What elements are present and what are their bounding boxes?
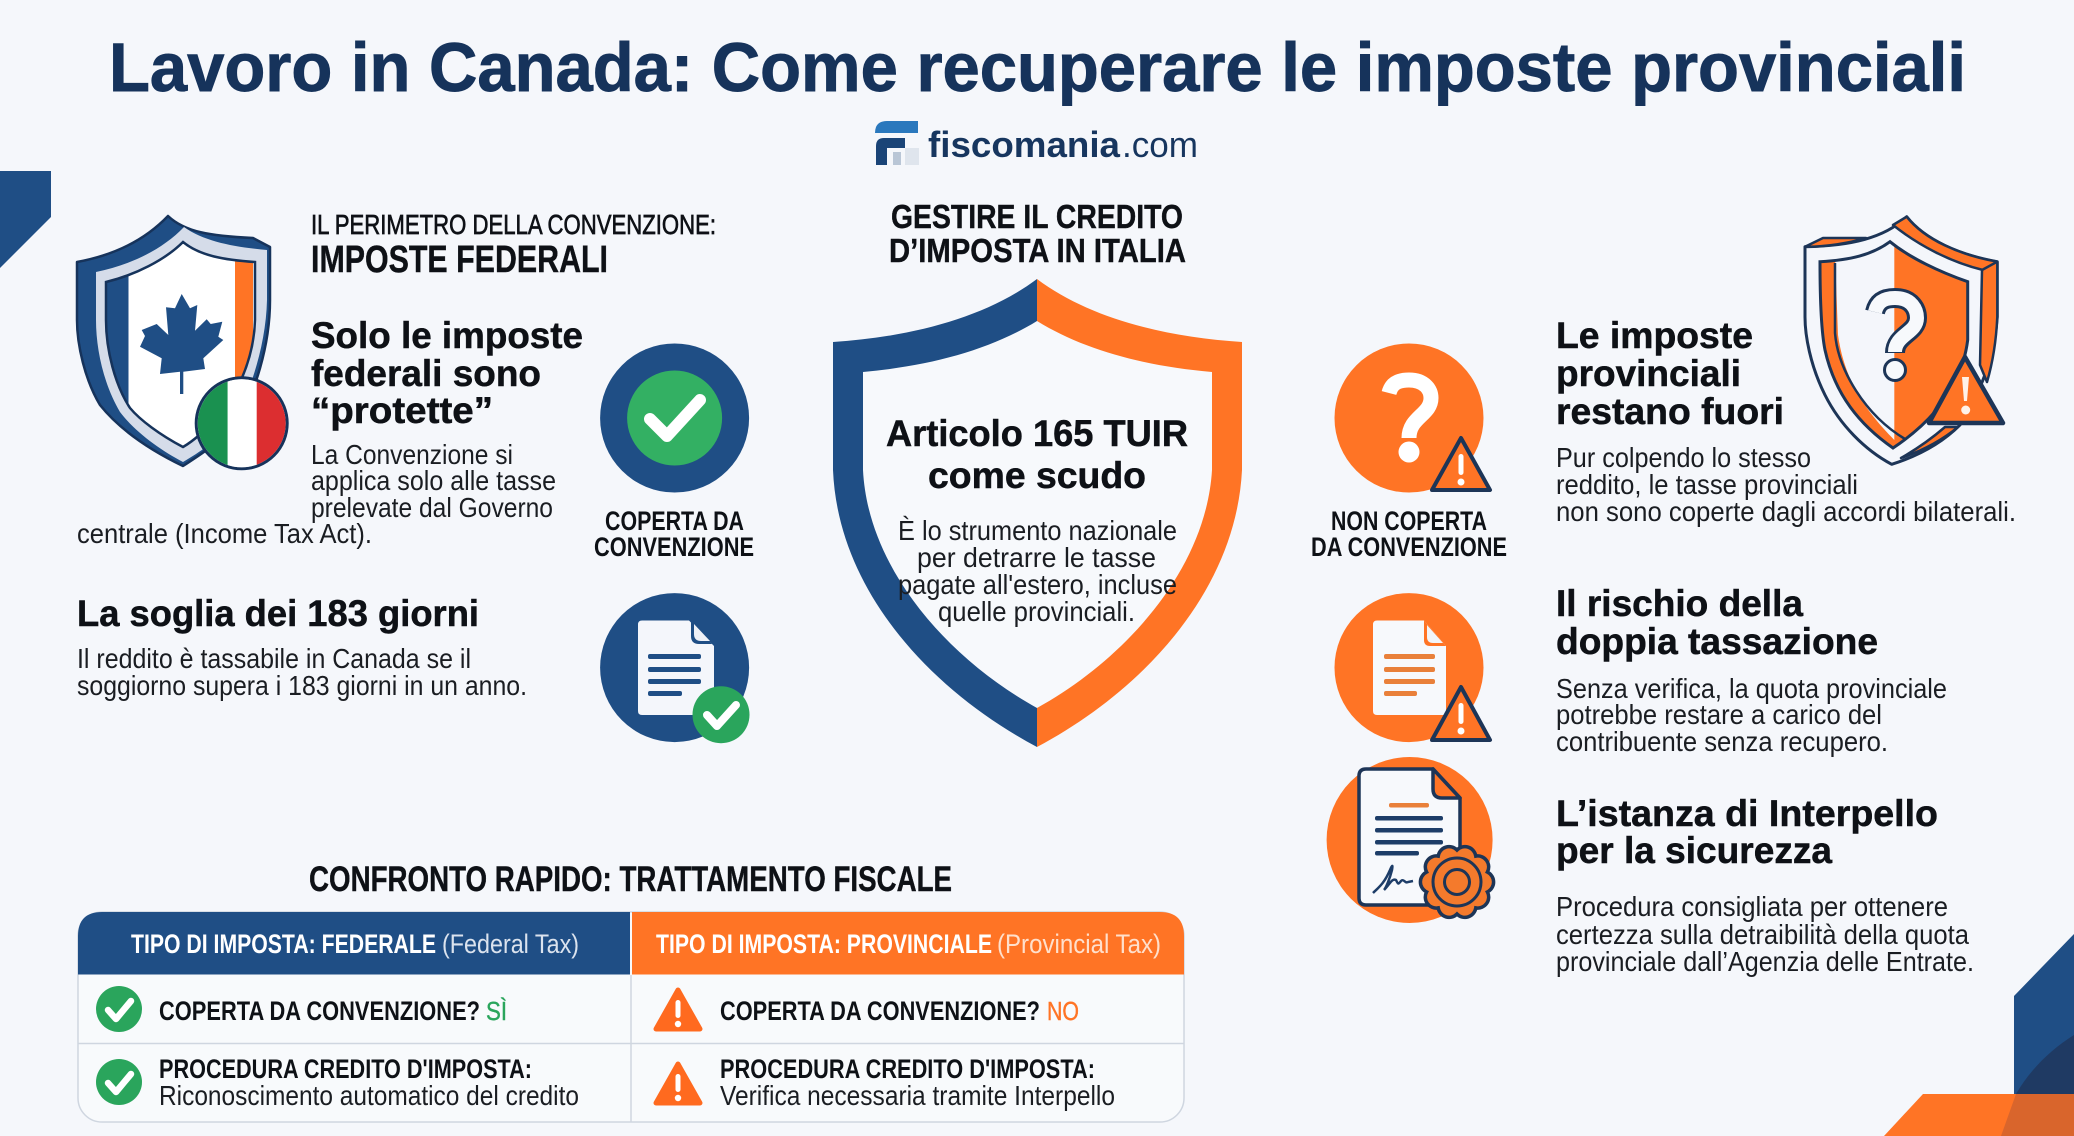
text block: imposte provinciali: Pur colpendo lo stesso xyxy=(1556,442,1811,473)
label: non coperta da convenzione xyxy=(1311,506,1507,562)
header: provinciale: (Provincial Tax) xyxy=(997,929,1161,959)
icon: orange document with warning xyxy=(1334,593,1490,742)
text block: solo le imposte federali: La Convenzione si xyxy=(311,439,513,470)
shield text: pagate all'estero, incluse xyxy=(898,569,1177,600)
center heading: GESTIRE IL CREDITO xyxy=(891,198,1183,235)
icon: orange shield with question and warning xyxy=(1805,217,2003,464)
label: non coperta da convenzione: NON COPERTA xyxy=(1331,506,1487,536)
text block: solo le imposte federali xyxy=(77,315,583,549)
seal xyxy=(1420,847,1494,917)
text block: soglia dei 183 giorni xyxy=(77,593,527,701)
text block: soglia dei 183 giorni: soggiorno supera i 183 giorni in un anno. xyxy=(77,670,527,701)
icon: orange interpello document with seal xyxy=(1327,757,1494,923)
text block: imposte provinciali: provinciali xyxy=(1556,353,1741,394)
text block: solo le imposte federali: applica solo alle tasse xyxy=(311,465,556,496)
logo text: fiscomania xyxy=(928,124,1121,165)
logo icon xyxy=(875,121,919,165)
row: provinciale procedura: Verifica necessaria tramite Interpello xyxy=(720,1080,1115,1111)
shield text: quelle provinciali. xyxy=(938,596,1135,627)
text block: soglia dei 183 giorni: La soglia dei 183 giorni xyxy=(77,593,479,634)
header: federale: TIPO DI IMPOSTA: FEDERALE xyxy=(131,929,436,959)
text block: imposte provinciali xyxy=(1556,315,2016,527)
icon: orange question circle xyxy=(1334,344,1490,492)
text block: solo le imposte federali: federali sono xyxy=(311,353,541,394)
header: federale xyxy=(78,912,630,974)
header: provinciale: TIPO DI IMPOSTA: PROVINCIALE xyxy=(656,929,992,959)
shield text: come scudo xyxy=(928,455,1146,496)
left section heading: IL PERIMETRO DELLA CONVENZIONE: xyxy=(311,209,716,240)
icon: Canada shield with Italian flag xyxy=(77,216,289,470)
text block: solo le imposte federali: “protette” xyxy=(311,390,493,431)
text block: doppia tassazione xyxy=(1556,583,1947,757)
question mark xyxy=(1875,298,1917,380)
decoration: bottom-right corner xyxy=(1884,934,2074,1136)
text block: istanza di interpello xyxy=(1556,793,1974,977)
logo: fiscomania.com xyxy=(875,121,1198,165)
central shield xyxy=(833,279,1242,747)
warning triangle xyxy=(1929,357,2003,423)
label: coperta da convenzione: CONVENZIONE xyxy=(594,532,754,562)
logo text: .com xyxy=(1122,124,1198,165)
text block: soglia dei 183 giorni: Il reddito è tassabile in Canada se il xyxy=(77,643,471,674)
row: provinciale coperta: NO xyxy=(1047,996,1079,1026)
row: federale procedura: PROCEDURA CREDITO D'IMPOSTA: xyxy=(159,1054,532,1084)
shield text xyxy=(886,413,1188,627)
shield text: per detrarre le tasse xyxy=(917,542,1156,573)
text block: istanza di interpello: certezza sulla detraibilità della quota xyxy=(1556,919,1969,950)
label: coperta da convenzione: COPERTA DA xyxy=(605,506,744,536)
left section heading xyxy=(311,209,716,281)
header: provinciale xyxy=(632,912,1184,974)
text block: solo le imposte federali: centrale (Income Tax Act). xyxy=(77,518,372,549)
header: federale: (Federal Tax) xyxy=(442,929,579,959)
text block: istanza di interpello: Procedura consigliata per ottenere xyxy=(1556,891,1948,922)
text block: imposte provinciali: reddito, le tasse provinciali xyxy=(1556,469,1858,500)
row: provinciale coperta: COPERTA DA CONVENZIONE? xyxy=(720,996,1040,1026)
maple leaf xyxy=(140,294,223,394)
center heading: D’IMPOSTA IN ITALIA xyxy=(889,232,1186,269)
table heading: CONFRONTO RAPIDO: TRATTAMENTO FISCALE xyxy=(309,860,952,899)
text block: istanza di interpello: L’istanza di Interpello xyxy=(1556,793,1938,834)
label: coperta da convenzione xyxy=(594,506,754,562)
row: federale coperta: COPERTA DA CONVENZIONE? xyxy=(159,996,480,1026)
text block: istanza di interpello: provinciale dall’Agenzia delle Entrate. xyxy=(1556,946,1974,977)
text block: doppia tassazione: potrebbe restare a carico del xyxy=(1556,699,1882,730)
row: provinciale procedura xyxy=(656,1054,1115,1111)
row: federale procedura xyxy=(96,1054,579,1111)
text block: imposte provinciali: non sono coperte dagli accordi bilaterali. xyxy=(1556,496,2016,527)
decoration: top-left corner xyxy=(0,171,51,268)
text block: istanza di interpello: per la sicurezza xyxy=(1556,830,1832,871)
row: provinciale procedura: PROCEDURA CREDITO D'IMPOSTA: xyxy=(720,1054,1095,1084)
row: federale procedura: Riconoscimento automatico del credito xyxy=(159,1080,579,1111)
text block: doppia tassazione: contribuente senza recupero. xyxy=(1556,726,1888,757)
shield text: È lo strumento nazionale xyxy=(898,515,1177,546)
row: provinciale coperta xyxy=(656,990,1079,1029)
center heading xyxy=(889,198,1186,269)
shield text: Articolo 165 TUIR xyxy=(886,413,1188,454)
Italian flag badge xyxy=(195,378,289,470)
text block: solo le imposte federali: prelevate dal Governo xyxy=(311,492,553,523)
row: federale coperta xyxy=(96,986,507,1032)
text block: doppia tassazione: doppia tassazione xyxy=(1556,621,1878,662)
text block: imposte provinciali: restano fuori xyxy=(1556,391,1784,432)
text block: doppia tassazione: Il rischio della xyxy=(1556,583,1803,624)
row: federale coperta: SÌ xyxy=(486,996,507,1026)
shield bevel bands xyxy=(1805,217,1997,458)
icon: blue document with check xyxy=(600,593,750,743)
left section heading: IMPOSTE FEDERALI xyxy=(311,239,608,281)
text block: imposte provinciali: Le imposte xyxy=(1556,315,1753,356)
text block: doppia tassazione: Senza verifica, la quota provinciale xyxy=(1556,673,1947,704)
comparison table xyxy=(78,912,1184,1122)
title: Lavoro in Canada: Come recuperare le imposte provinciali xyxy=(109,29,1966,106)
label: non coperta da convenzione: DA CONVENZIONE xyxy=(1311,532,1507,562)
logo text xyxy=(928,124,1198,165)
text block: solo le imposte federali: Solo le imposte xyxy=(311,315,583,356)
icon: blue check circle xyxy=(600,344,749,492)
